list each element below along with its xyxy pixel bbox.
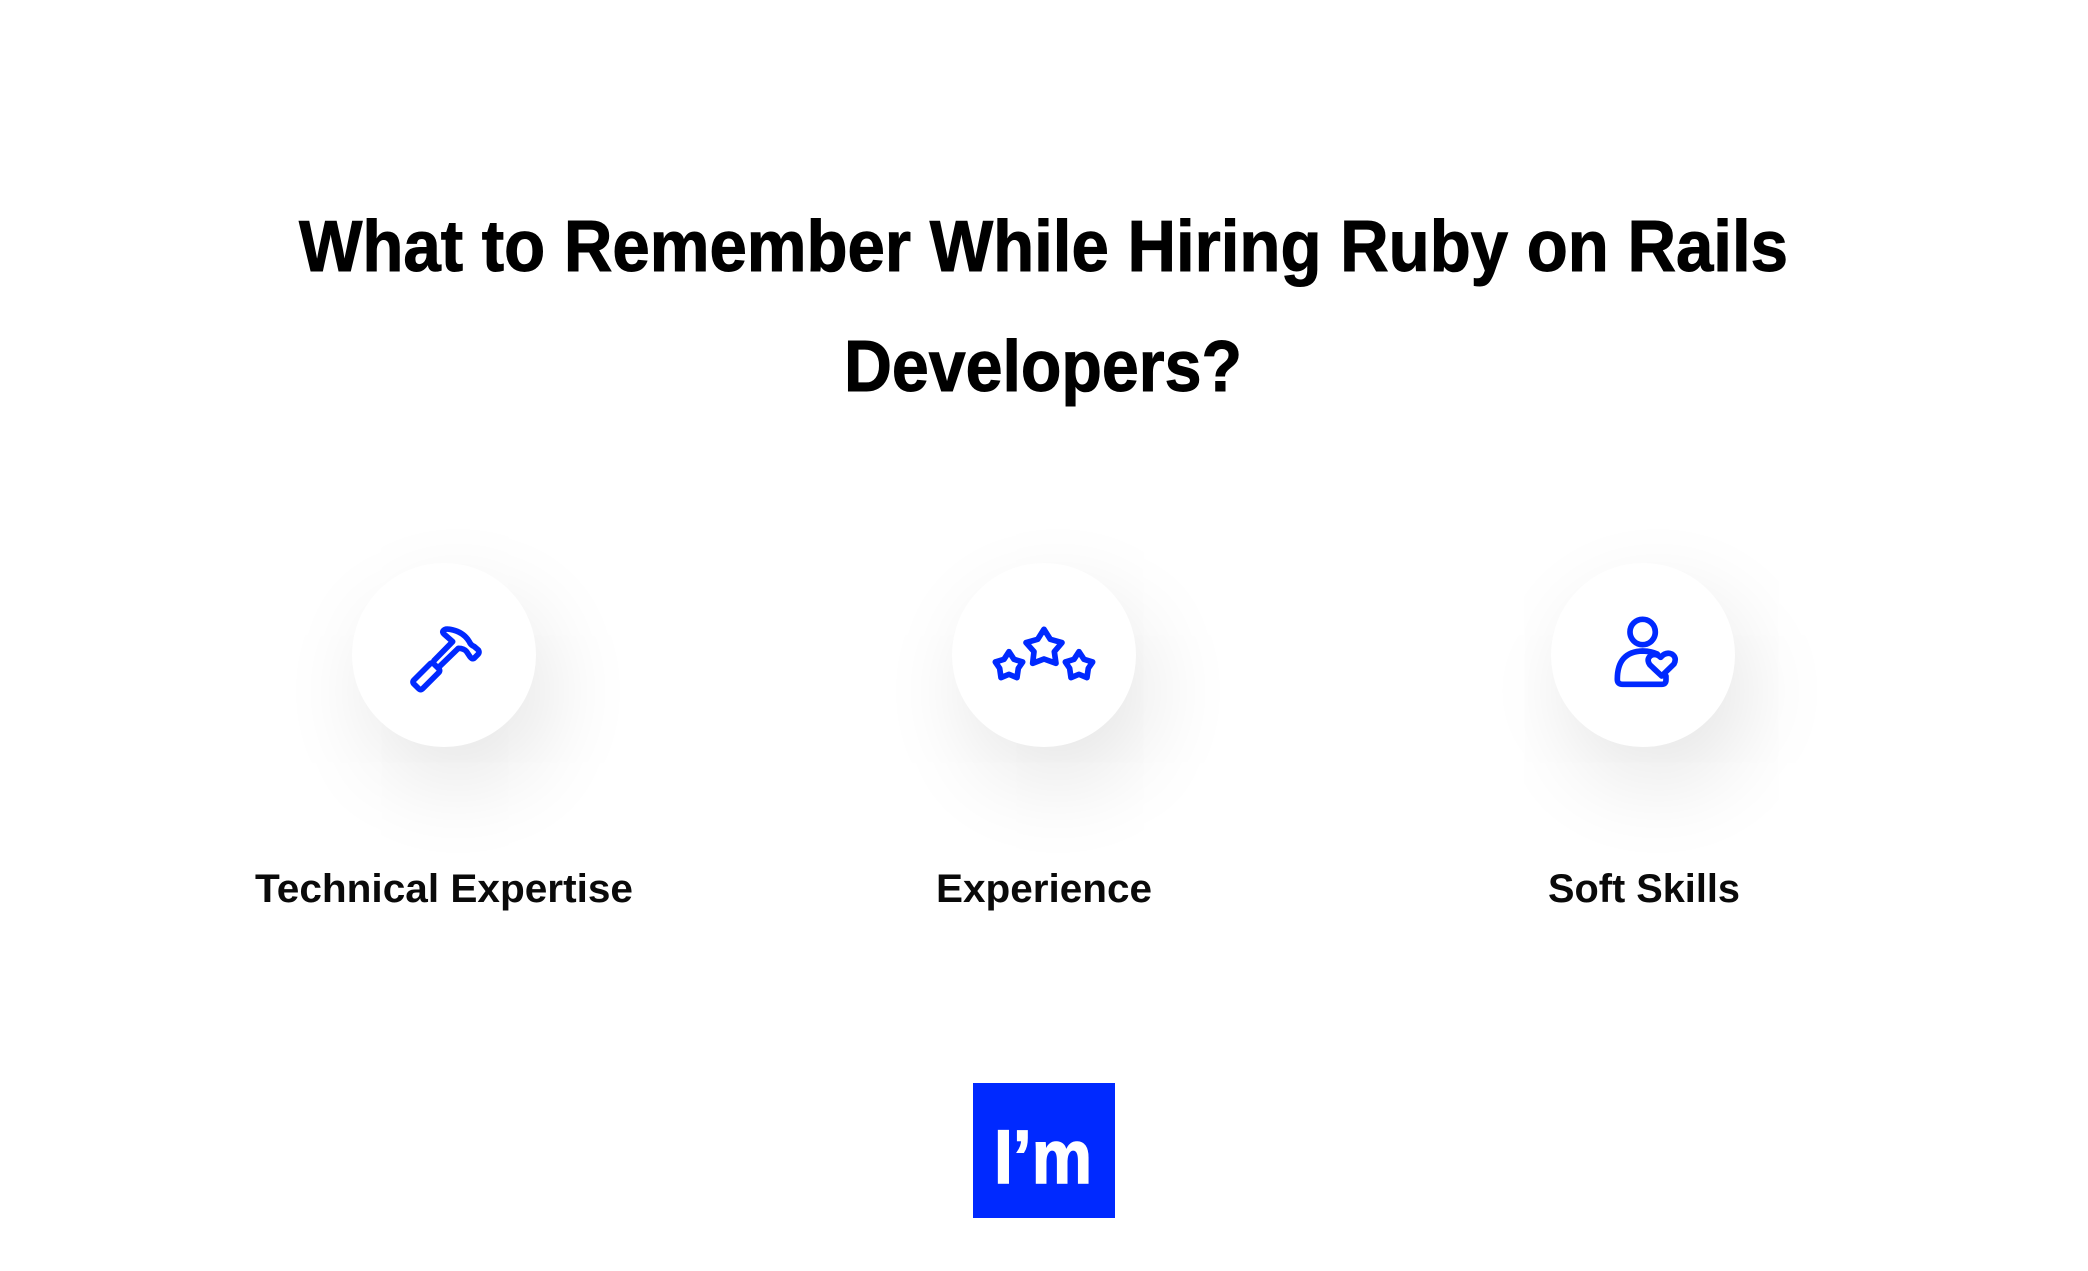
title: What to Remember While Hiring Ruby on Rails xyxy=(299,207,1788,287)
label: technical expertise: Technical Expertise xyxy=(255,867,633,911)
icon circle: technical expertise xyxy=(352,563,536,747)
panel: experience xyxy=(936,626,1155,911)
icon: three stars xyxy=(992,626,1096,680)
logo xyxy=(973,1083,1115,1218)
logo: I’m xyxy=(994,1115,1092,1200)
panel: soft skills xyxy=(1548,616,1758,911)
label: soft skills: Soft Skills xyxy=(1548,867,1740,911)
icon circle: experience xyxy=(952,563,1136,747)
title: Developers? xyxy=(844,327,1242,407)
icon circle: soft skills xyxy=(1551,563,1735,747)
icon: person with heart xyxy=(1614,616,1678,688)
label: experience: Experience xyxy=(936,867,1152,911)
icon: hammer xyxy=(410,626,482,692)
panel: technical expertise xyxy=(255,626,633,911)
title xyxy=(298,207,1788,407)
